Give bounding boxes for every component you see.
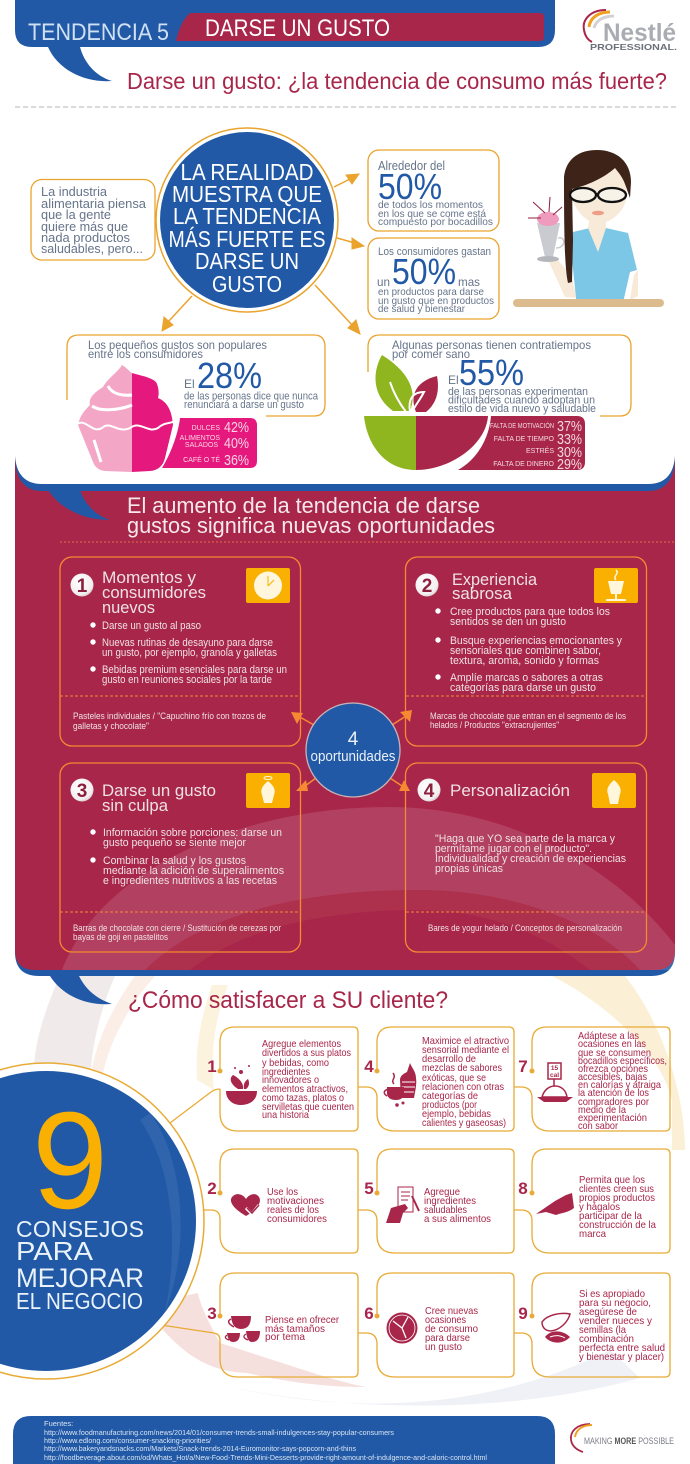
card 3: darse un gusto sin culpa: 3 xyxy=(77,781,87,802)
stat box: 50% momentos: compuesto por bocadillos xyxy=(378,216,493,228)
panel: pequeños gustos: renunciará a darse un gusto xyxy=(184,399,304,411)
card 3: darse un gusto sin culpa: bayas de goji en pastelitos xyxy=(73,932,168,942)
card 1: momentos y consumidores nuevos: Pasteles individuales / "Capuchino frío con trozos de xyxy=(73,711,266,721)
tip 6: para darse xyxy=(425,1332,470,1344)
arrows from central circle xyxy=(162,174,364,334)
tip 9 xyxy=(514,1273,670,1377)
section heading: oportunidades: gustos significa nuevas oportunidades xyxy=(127,513,495,538)
stats box: pequeños gustos: 36% xyxy=(224,453,249,469)
stats box: pequeños gustos xyxy=(162,418,257,469)
stat box: 50% gasto: un xyxy=(377,275,390,289)
icon: 15 cal plate: 15 xyxy=(551,1065,558,1072)
callout: la industria alimentaria: nada productos xyxy=(41,231,130,245)
card 3: darse un gusto sin culpa: Darse un gusto xyxy=(102,781,216,800)
tip 1: elementos atractivos, xyxy=(262,1083,348,1095)
section heading: cómo satisfacer: ¿Cómo satisfacer a SU cliente? xyxy=(128,987,448,1014)
stat box: 50% gasto: Los consumidores gastan xyxy=(378,246,491,258)
panel: pequeños gustos: de las personas dice que nunca xyxy=(184,390,319,402)
tip 8: Permita que los xyxy=(579,1174,645,1186)
tip 4: 4 xyxy=(364,1057,374,1076)
tip 3 xyxy=(207,1273,358,1377)
icon: bowl with leaves xyxy=(364,355,488,470)
panel: contratiempos xyxy=(364,335,631,473)
card 3: darse un gusto sin culpa: Barras de chocolate con cierre / Sustitución de cerezas por xyxy=(73,923,281,933)
footer: sources: http://www.bakeryandsnacks.com/Markets/Snack-trends-2014-Euromonitor-says-popcorn-and-thins xyxy=(44,1444,356,1453)
card 3: darse un gusto sin culpa: gusto pequeño se siente mejor xyxy=(103,837,246,849)
tip 7: 7 xyxy=(518,1057,528,1076)
card 1: momentos y consumidores nuevos: gusto en reuniones sociales por la tarde xyxy=(102,674,272,686)
tip 4: sensorial mediante el xyxy=(422,1044,509,1056)
card 4: personalización: permítame jugar con el producto". xyxy=(435,843,592,855)
tip 7: que se consumen xyxy=(578,1047,651,1059)
tip 5: Agregue xyxy=(424,1186,460,1198)
stats box: contratiempos: FALTA DE DINERO xyxy=(493,461,555,468)
card 2: experiencia sabrosa: sentidos se den un gusto xyxy=(450,616,566,628)
tail: section 3 xyxy=(50,976,112,1004)
central circle: la realidad: DARSE UN xyxy=(195,248,299,274)
panel: contratiempos: por comer sano xyxy=(392,347,470,361)
central circle: la realidad: LA REALIDAD xyxy=(180,159,314,185)
card 4: personalización: 4 xyxy=(424,781,435,802)
tip 8: y hágalos xyxy=(579,1201,620,1213)
tip 1: 1 xyxy=(207,1057,217,1076)
card 4: personalización xyxy=(406,763,646,952)
tip 1 xyxy=(207,1027,358,1131)
card 2: experiencia sabrosa: Experiencia xyxy=(452,570,538,589)
stats box: pequeños gustos: ALIMENTOS xyxy=(180,435,220,442)
panel: contratiempos: dificultades cuando adoptan un xyxy=(448,394,595,406)
tip 6 xyxy=(358,1273,514,1377)
stats box: contratiempos: ESTRÉS xyxy=(526,446,554,455)
tip 8: marca xyxy=(579,1228,606,1240)
big circle: 9 consejos: PARA xyxy=(16,1236,94,1266)
card 4: personalización: Personalización xyxy=(450,781,570,800)
tip 7: accesibles, bajas xyxy=(578,1071,647,1083)
main title: Darse un gusto: ¿la tendencia de consumo más fuerte? xyxy=(127,68,667,94)
card 4: personalización: Individualidad y creación de experiencias xyxy=(435,853,626,865)
card 1: momentos y consumidores nuevos: consumidores xyxy=(102,583,206,602)
footer: sources: http://www.edlong.com/consumer-snacking-priorities/ xyxy=(44,1436,212,1445)
card 2: experiencia sabrosa: sensoriales que combinen sabor, xyxy=(450,645,601,657)
card 1: momentos y consumidores nuevos: nuevos xyxy=(102,598,155,617)
tip 5: 5 xyxy=(364,1179,374,1198)
stats box: contratiempos: 37% xyxy=(557,419,582,435)
stat box: 50% momentos: Alrededor del xyxy=(378,159,445,173)
tip 6: de consumo xyxy=(425,1323,478,1335)
tip 6: 6 xyxy=(364,1304,374,1323)
footer: sources: Fuentes: xyxy=(44,1419,73,1428)
card 2: experiencia sabrosa: Cree productos para que todos los xyxy=(450,606,610,618)
tip 9: semillas (la xyxy=(579,1324,626,1336)
Making More Possible logo xyxy=(571,1424,674,1452)
tip 9: vender nueces y xyxy=(579,1315,653,1327)
tip 9: asegúrese de xyxy=(579,1306,637,1318)
card 2: experiencia sabrosa xyxy=(406,557,646,746)
tip 1: Agregue elementos xyxy=(262,1038,341,1050)
tip 5 xyxy=(358,1149,514,1253)
card 2: experiencia sabrosa: textura, aroma, sonido y formas xyxy=(450,655,599,667)
stats box: pequeños gustos: 40% xyxy=(224,436,249,452)
stats box: contratiempos xyxy=(458,416,585,473)
tip 8: participar de la xyxy=(579,1210,642,1222)
section heading: oportunidades xyxy=(127,493,495,538)
tip 4: relacionen con otras xyxy=(422,1081,504,1093)
footer: sources: http://www.foodmanufacturing.com/news/2014/01/consumer-trends-small-indulgences-stay-popular-consumers xyxy=(44,1428,394,1437)
tip 7 xyxy=(514,1027,670,1132)
tip 9: 9 xyxy=(518,1304,528,1323)
tip 6: ocasiones xyxy=(425,1314,466,1326)
tip 8: construcción de la xyxy=(579,1219,656,1231)
tip 3: más tamaños xyxy=(265,1323,325,1335)
card 2: experiencia sabrosa: sabrosa xyxy=(452,584,513,603)
big circle: 9 consejos xyxy=(0,1063,204,1379)
icon: 15 cal plate xyxy=(537,1063,573,1102)
card 1: momentos y consumidores nuevos: Darse un gusto al paso xyxy=(102,620,201,632)
callout: la industria alimentaria xyxy=(31,180,155,260)
tip 9: Si es apropiado xyxy=(579,1288,645,1300)
card 2: experiencia sabrosa: helados / Productos "extracrujientes" xyxy=(430,720,559,730)
footer: sources: http://foodbeverage.about.com/od/Whats_Hot/a/New-Food-Trends-Mini-Desserts-provide-right-amount-of-indulgence-and-caloric-control.html xyxy=(44,1453,487,1462)
icon: heart with check xyxy=(231,1194,260,1216)
icon: cupcake xyxy=(77,365,175,472)
tip 2: motivaciones xyxy=(267,1195,324,1207)
tip 4: desarrollo de xyxy=(422,1053,476,1065)
stats box: pequeños gustos: SALADOS xyxy=(185,442,218,449)
callout: la industria alimentaria: saludables, pero... xyxy=(41,242,143,256)
big circle: 9 consejos: EL NEGOCIO xyxy=(16,1288,143,1314)
tip 9: combinación xyxy=(579,1333,634,1345)
tip 7: compradores por xyxy=(578,1096,649,1108)
stats box: contratiempos: 30% xyxy=(557,445,582,461)
tip 3: Piense en ofrecer xyxy=(265,1314,339,1326)
stat box: 50% momentos: en los que se come está xyxy=(378,208,486,220)
icon: frozen dessert xyxy=(246,773,290,808)
stat box: 50% gasto: de salud y bienestar xyxy=(378,303,465,315)
callout: la industria alimentaria: que la gente xyxy=(41,208,111,222)
card 1: momentos y consumidores nuevos: Nuevas rutinas de desayuno para darse xyxy=(102,637,273,649)
stats box: pequeños gustos: 42% xyxy=(224,420,249,436)
tip 8: propios productos xyxy=(579,1192,655,1204)
icon: nuts and seeds xyxy=(542,1313,570,1343)
center circle: 4 oportunidades xyxy=(291,703,412,797)
tip 8: 8 xyxy=(518,1179,528,1198)
tip 7: ofrezca opciones xyxy=(578,1063,648,1075)
card 3: darse un gusto sin culpa: e ingredientes nutritivos a las recetas xyxy=(103,875,277,887)
tip 1: innovadores o xyxy=(262,1074,319,1086)
icon: pointing hand xyxy=(536,1193,574,1215)
card 1: momentos y consumidores nuevos xyxy=(60,557,300,746)
card 2: experiencia sabrosa: Marcas de chocolate que entran en el segmento de los xyxy=(430,711,626,721)
Nestlé Professional logo xyxy=(584,10,677,52)
center circle: 4 oportunidades: oportunidades xyxy=(310,748,396,765)
tip 8: clientes creen sus xyxy=(579,1183,654,1195)
tip 2: 2 xyxy=(207,1179,217,1198)
icon: ice cream xyxy=(592,773,636,808)
tip 7: con sabor xyxy=(578,1120,618,1132)
card 3: darse un gusto sin culpa xyxy=(60,763,300,952)
central circle: la realidad: LA TENDENCIA xyxy=(173,203,322,229)
callout: la industria alimentaria: alimentaria piensa xyxy=(41,197,146,211)
big circle: 9 consejos: 9 xyxy=(32,1084,108,1238)
tip 7: en calorías y atraiga xyxy=(578,1079,661,1091)
tip 7: ocasiones en las xyxy=(578,1038,646,1050)
icon: hand holding paper xyxy=(386,1187,419,1223)
icon: clock with utensils xyxy=(386,1312,418,1344)
tip 4: mezclas de sabores xyxy=(422,1062,502,1074)
background swirl in lower section xyxy=(34,976,685,1406)
tip 1: servilletas que cuenten xyxy=(262,1101,354,1113)
illustration: woman with milkshake xyxy=(513,150,664,307)
tip 2: reales de los xyxy=(267,1204,319,1216)
tip 6: un gusto xyxy=(425,1341,462,1353)
footer: sources xyxy=(13,1416,555,1464)
card 4: personalización: Bares de yogur helado / Conceptos de personalización xyxy=(428,923,622,933)
tip 7: la atención de los xyxy=(578,1087,649,1099)
stat box: 50% momentos: 50% xyxy=(378,166,442,207)
big circle: 9 consejos: CONSEJOS xyxy=(16,1216,144,1242)
card 3: darse un gusto sin culpa: Información sobre porciones: darse un xyxy=(103,827,282,839)
tip 3: 3 xyxy=(207,1304,217,1323)
card 4: personalización: propias únicas xyxy=(435,863,503,875)
icon: bowl with sparkles xyxy=(226,1065,257,1105)
panel: contratiempos: de las personas experimentan xyxy=(448,386,588,398)
tip 1: divertidos a sus platos xyxy=(262,1047,351,1059)
icon: 15 cal plate: cal xyxy=(550,1072,559,1079)
tip 7: bocadillos específicos, xyxy=(578,1055,667,1067)
stat box: 50% gasto: 50% xyxy=(392,251,456,292)
panel: pequeños gustos: entre los consumidores xyxy=(88,347,203,361)
tip 2: consumidores xyxy=(267,1213,327,1225)
card 3: darse un gusto sin culpa: Combinar la salud y los gustos xyxy=(103,855,246,867)
card 2: experiencia sabrosa: Amplíe marcas o sabores a otras xyxy=(450,672,603,684)
tip 2: Use los xyxy=(267,1186,298,1198)
tip 6: Cree nuevas xyxy=(425,1305,478,1317)
tip 7: Adáptese a las xyxy=(578,1030,639,1042)
card 3: darse un gusto sin culpa: mediante la adición de superalimentos xyxy=(103,865,284,877)
stat box: 50% gasto xyxy=(368,238,499,319)
central circle: la realidad xyxy=(156,128,338,312)
tip 1: ingredientes xyxy=(262,1066,310,1078)
tip 7: experimentación xyxy=(578,1112,647,1124)
tip 4: productos (por xyxy=(422,1099,477,1111)
tip 2 xyxy=(207,1149,358,1253)
panel: contratiempos: 55% xyxy=(459,352,524,393)
tip 1: como tazas, platos o xyxy=(262,1092,344,1104)
central circle: la realidad: GUSTO xyxy=(212,271,282,297)
panel: pequeños gustos: El xyxy=(184,377,195,391)
big circle: 9 consejos: MEJORAR xyxy=(16,1263,144,1293)
tip 5: ingredientes xyxy=(424,1195,476,1207)
Nestlé Professional logo: Nestlé xyxy=(603,19,676,47)
central circle: la realidad: MÁS FUERTE ES xyxy=(168,226,326,252)
connector lines xyxy=(161,1089,220,1340)
panel: contratiempos: estilo de vida nuevo y saludable xyxy=(448,403,596,415)
header banner xyxy=(15,0,555,81)
Making More Possible logo: MAKING MORE POSSIBLE xyxy=(584,1436,674,1446)
section heading: oportunidades: El aumento de la tendencia de darse xyxy=(127,493,480,518)
header banner: DARSE UN GUSTO xyxy=(205,15,390,42)
panel: pequeños gustos xyxy=(67,335,325,472)
callout: la industria alimentaria: La industria xyxy=(41,185,107,199)
stat box: 50% gasto: un gusto que en productos xyxy=(378,295,494,307)
tip 1: una historia xyxy=(262,1109,309,1121)
card 1: momentos y consumidores nuevos: Bebidas premium esenciales para darse un xyxy=(102,664,287,676)
stats box: contratiempos: 29% xyxy=(557,457,582,473)
card 1: momentos y consumidores nuevos: galletas y chocolate" xyxy=(73,721,149,731)
tip 9: para su negocio, xyxy=(579,1297,651,1309)
panel: contratiempos: El xyxy=(448,373,459,387)
callout: la industria alimentaria: quiere más que xyxy=(41,220,128,234)
header banner: TENDENCIA 5 xyxy=(28,19,169,46)
icon: coffee and dessert xyxy=(384,1063,416,1107)
tip 4: ejemplo, bebidas xyxy=(422,1108,491,1120)
tip 4: categorías de xyxy=(422,1090,478,1102)
icon: clock xyxy=(246,568,290,603)
background swirl in red section xyxy=(62,807,675,970)
tip 9: perfecta entre salud xyxy=(579,1342,665,1354)
tip 4: exóticas, que se xyxy=(422,1072,486,1084)
tip 7: medio de la xyxy=(578,1104,626,1116)
Nestlé Professional logo: PROFESSIONAL. xyxy=(590,42,677,52)
tip 9: y bienestar y placer) xyxy=(579,1351,664,1363)
stats box: contratiempos: 33% xyxy=(557,432,582,448)
card 1: momentos y consumidores nuevos: 1 xyxy=(77,576,88,597)
stats box: contratiempos: FALTA DE TIEMPO xyxy=(494,436,555,443)
card 1: momentos y consumidores nuevos: Momentos y xyxy=(102,568,197,587)
icon: hot drink xyxy=(594,568,638,603)
stats box: contratiempos: FALTA DE MOTIVACIÓN xyxy=(490,421,554,430)
stat box: 50% momentos xyxy=(368,150,499,231)
stats box: pequeños gustos: CAFÉ O TÉ xyxy=(183,455,220,464)
tip 8 xyxy=(514,1149,670,1253)
card 2: experiencia sabrosa: Busque experiencias emocionantes y xyxy=(450,635,622,647)
tip 4: Maximice el atractivo xyxy=(422,1035,509,1047)
tip 5: saludables xyxy=(424,1204,467,1216)
red section with blue edge xyxy=(15,440,675,976)
panel: pequeños gustos: 28% xyxy=(197,355,262,396)
center circle: 4 oportunidades: 4 xyxy=(348,729,359,750)
central circle: la realidad: MUESTRA QUE xyxy=(172,181,322,207)
panel: contratiempos: Algunas personas tienen contratiempos xyxy=(392,338,591,352)
stat box: 50% gasto: mas xyxy=(458,275,480,289)
panel: pequeños gustos: Los pequeños gustos son populares xyxy=(88,338,267,352)
card 3: darse un gusto sin culpa: sin culpa xyxy=(102,796,169,815)
tip 3: por tema xyxy=(265,1331,305,1343)
card 2: experiencia sabrosa: categorías para darse un gusto xyxy=(450,682,596,694)
icon: three cups xyxy=(225,1316,260,1342)
card 2: experiencia sabrosa: 2 xyxy=(422,576,432,597)
tip 4: calientes y gaseosas) xyxy=(422,1117,506,1129)
stat box: 50% momentos: de todos los momentos xyxy=(378,199,483,211)
tip 4 xyxy=(358,1027,514,1131)
stat box: 50% gasto: en productos para darse xyxy=(378,286,484,298)
tip 1: y bebidas, como xyxy=(262,1057,329,1069)
card 1: momentos y consumidores nuevos: un gusto, por ejemplo, granola y galletas xyxy=(102,647,277,659)
stats box: pequeños gustos: DULCES xyxy=(192,425,220,432)
tip 5: a sus alimentos xyxy=(424,1213,491,1225)
card 4: personalización: "Haga que YO sea parte de la marca y xyxy=(435,833,615,845)
